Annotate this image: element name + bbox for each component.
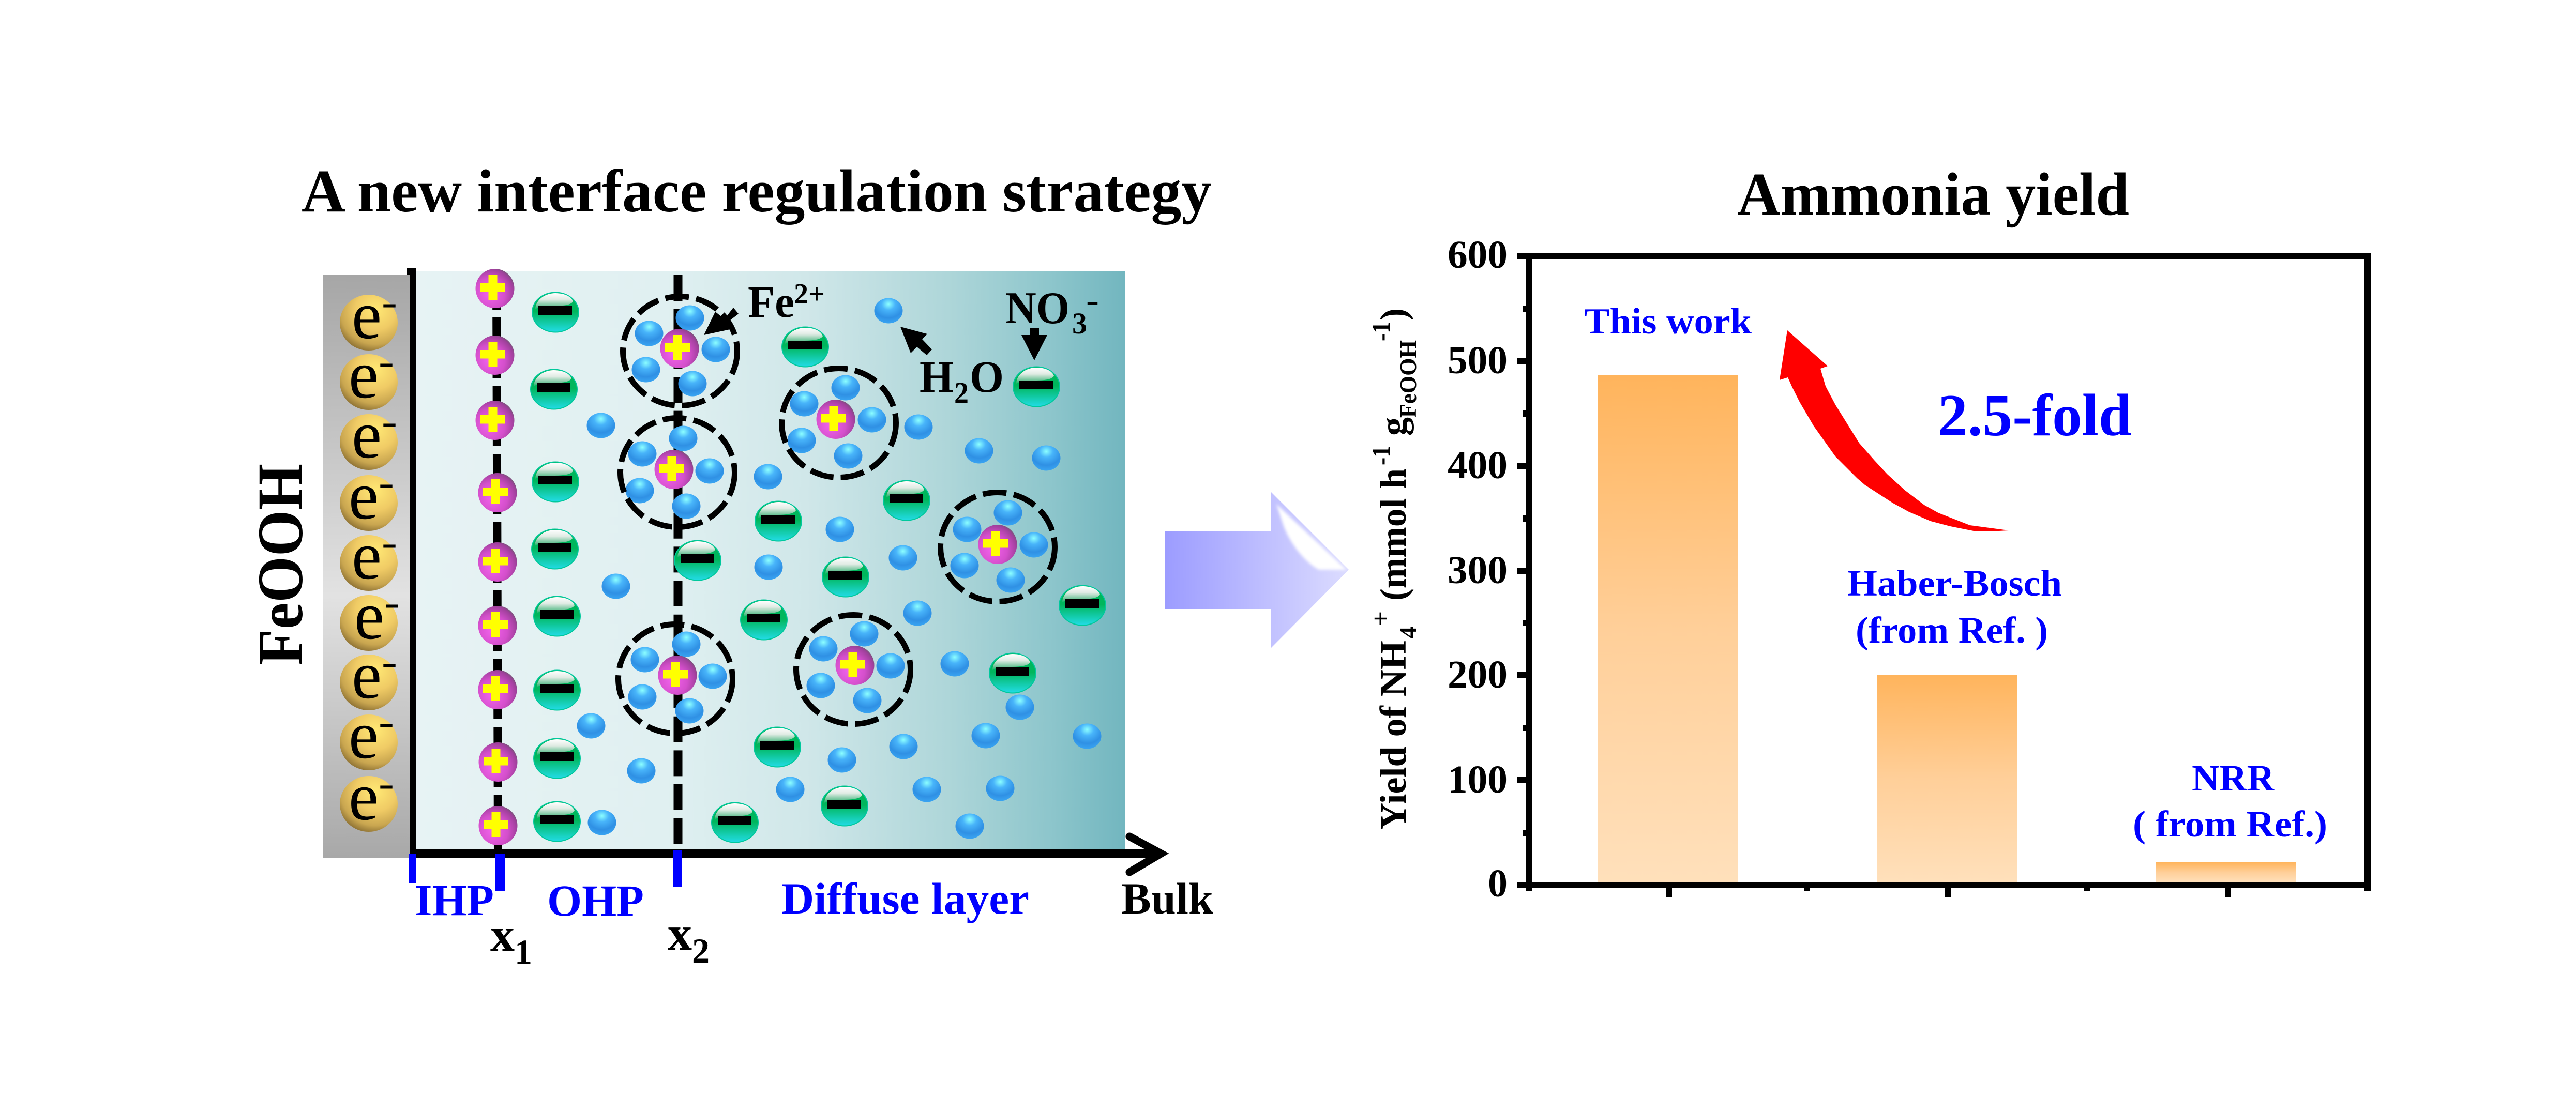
electrons column: e bbox=[349, 697, 379, 773]
cations at IHP bbox=[476, 269, 517, 845]
y axis tick labels: 100 bbox=[1448, 758, 1508, 801]
panel: electrical double layer diagram bbox=[323, 268, 1213, 971]
y axis title: Yield of NH bbox=[1373, 641, 1414, 830]
arrow: to Fe2+ bbox=[704, 308, 739, 335]
label: NRR from Ref.: NRR bbox=[2192, 757, 2275, 799]
label: NO3-: 3 bbox=[1072, 307, 1087, 340]
title: A new interface regulation strategy: A new interface regulation strategy bbox=[302, 157, 1212, 225]
label: H2O bbox=[920, 352, 1004, 409]
label: H2O: 2 bbox=[954, 376, 969, 409]
label: H2O: H bbox=[920, 352, 954, 402]
electrons column bbox=[340, 277, 400, 834]
electrons column: e bbox=[349, 337, 379, 413]
label: NRR from Ref. bbox=[2133, 757, 2327, 845]
bar: Haber-Bosch bbox=[1877, 675, 2017, 882]
label: Haber-Bosch from Ref.: Haber-Bosch bbox=[1847, 562, 2062, 604]
electrons column: - bbox=[382, 283, 397, 323]
electrons column: e bbox=[352, 397, 382, 473]
arrow: red curved arrow bbox=[1780, 330, 2009, 531]
y axis tick labels: 200 bbox=[1448, 653, 1508, 696]
plot frame and ticks bbox=[1517, 253, 2371, 897]
electrons column: e bbox=[352, 277, 382, 353]
label: Diffuse layer: Diffuse layer bbox=[781, 874, 1029, 923]
label: x1: x bbox=[490, 908, 515, 962]
label: 2.5-fold: 2.5-fold bbox=[1938, 383, 2132, 448]
bar: This work bbox=[1598, 375, 1738, 882]
label: FeOOH electrode: FeOOH bbox=[245, 464, 317, 665]
y axis title bbox=[1366, 308, 1421, 830]
label: OHP: OHP bbox=[547, 876, 644, 925]
label: Fe2+: Fe bbox=[748, 277, 794, 327]
label: Fe2+ bbox=[748, 277, 825, 327]
electrons column: e bbox=[354, 577, 384, 653]
title: Ammonia yield: Ammonia yield bbox=[1737, 160, 2129, 228]
y axis title: 4 bbox=[1395, 627, 1421, 638]
blue boundary ticks bbox=[409, 850, 682, 891]
nitrate anions bbox=[531, 293, 1106, 843]
bar: NRR bbox=[2156, 862, 2296, 882]
bar chart: ammonia yield bbox=[1366, 233, 2371, 905]
arrow: block arrow to chart bbox=[1165, 492, 1349, 648]
dashed line x1 (IHP) bbox=[496, 271, 498, 853]
label: x2: x bbox=[668, 907, 692, 961]
electrons column: e bbox=[349, 758, 379, 834]
y axis title: g bbox=[1373, 417, 1414, 436]
y axis tick labels: 500 bbox=[1448, 339, 1508, 382]
label: x1: 1 bbox=[515, 932, 532, 971]
label: x2 bbox=[668, 907, 710, 970]
y axis title: FeOOH bbox=[1395, 340, 1421, 418]
electrons column: e bbox=[352, 518, 382, 593]
label: Fe2+: 2+ bbox=[794, 278, 825, 310]
electrons column: - bbox=[382, 402, 397, 442]
label: IHP: IHP bbox=[415, 875, 494, 925]
label: Bulk: Bulk bbox=[1121, 874, 1213, 923]
arrow: to NO3- bbox=[1021, 328, 1047, 360]
electrons column: - bbox=[379, 463, 394, 503]
y axis title: (mmol h bbox=[1373, 468, 1414, 601]
free water molecules bbox=[577, 298, 1102, 839]
solvated Fe2+ clusters bbox=[619, 297, 1055, 733]
y axis title: + bbox=[1366, 611, 1395, 626]
electrode gray bar bbox=[323, 275, 410, 858]
electrons column: - bbox=[379, 764, 394, 804]
label: x2: 2 bbox=[692, 931, 710, 970]
label: NO3-: NO bbox=[1005, 283, 1069, 333]
y axis tick labels: 300 bbox=[1448, 549, 1508, 592]
label: Haber-Bosch from Ref. bbox=[1847, 562, 2062, 651]
electrons column: - bbox=[379, 703, 394, 742]
label: NO3-: - bbox=[1086, 285, 1099, 317]
label: This work: This work bbox=[1584, 301, 1752, 342]
electrons column: - bbox=[379, 342, 394, 382]
electrons column: e bbox=[349, 458, 379, 534]
y axis tick labels bbox=[1448, 233, 1508, 905]
arrow: to H2O bbox=[900, 327, 932, 355]
label: Haber-Bosch from Ref.: (from Ref. ) bbox=[1856, 610, 2048, 651]
label: H2O: O bbox=[970, 352, 1004, 402]
y axis title: -1 bbox=[1366, 322, 1395, 341]
electrons column: - bbox=[382, 643, 397, 682]
electrons column: - bbox=[384, 583, 400, 623]
electrolyte background bbox=[416, 271, 1125, 850]
label: NRR from Ref.: ( from Ref.) bbox=[2133, 803, 2327, 845]
y axis tick labels: 0 bbox=[1488, 862, 1508, 905]
electrons column: - bbox=[382, 523, 397, 563]
dashed line x2 (OHP) bbox=[673, 275, 683, 853]
label: NO3- bbox=[1005, 283, 1099, 340]
y axis tick labels: 400 bbox=[1448, 444, 1508, 487]
label: x1 bbox=[490, 908, 532, 971]
electrons column: e bbox=[352, 637, 382, 713]
y axis tick labels: 600 bbox=[1448, 233, 1508, 277]
y axis title: -1 bbox=[1366, 446, 1395, 465]
y axis title: ) bbox=[1373, 308, 1414, 321]
axes bbox=[407, 268, 1161, 872]
